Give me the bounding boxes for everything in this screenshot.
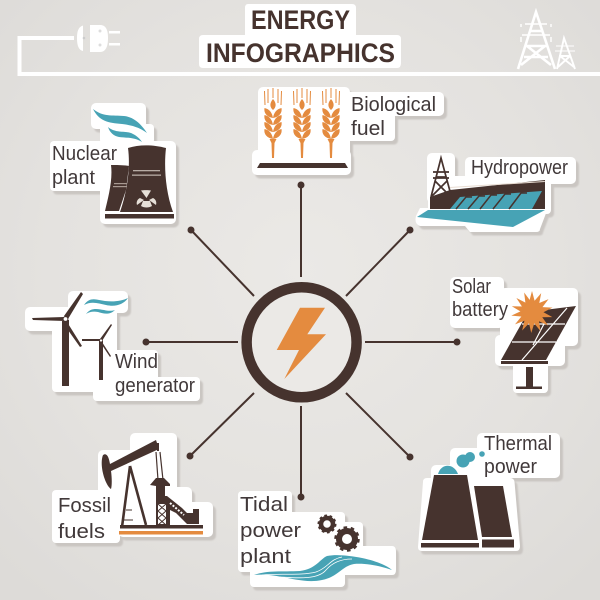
panel: nuclear plant bbox=[50, 103, 176, 224]
sticker bbox=[52, 433, 213, 543]
label bbox=[351, 94, 436, 140]
title: INFOGRAPHICS bbox=[206, 38, 395, 68]
label bbox=[115, 351, 195, 397]
label: Solar bbox=[452, 276, 491, 298]
sticker bbox=[416, 153, 576, 232]
icon: plug bbox=[77, 25, 120, 52]
wind swirls bbox=[84, 298, 128, 306]
pump rod bbox=[156, 452, 163, 480]
frame bbox=[122, 466, 146, 527]
sticker bbox=[25, 291, 200, 401]
sticker bbox=[418, 433, 560, 551]
gearbox tower bbox=[150, 478, 199, 525]
panel: thermal power bbox=[418, 433, 560, 551]
label bbox=[484, 433, 552, 478]
label: power bbox=[240, 520, 301, 542]
sun bbox=[511, 291, 553, 333]
panel: tidal power plant bbox=[238, 491, 396, 587]
tower bbox=[431, 158, 451, 197]
panel: fossil fuels bbox=[52, 433, 213, 543]
panel: wind generator bbox=[25, 291, 200, 401]
title stickers bbox=[199, 4, 401, 68]
wheat bbox=[264, 88, 340, 158]
icon: lightning bolt bbox=[277, 308, 326, 379]
turbines bbox=[450, 191, 542, 209]
label: battery bbox=[452, 299, 508, 321]
panel: hydropower bbox=[416, 153, 576, 232]
label: Wind bbox=[115, 351, 158, 373]
label bbox=[52, 143, 117, 189]
label bbox=[452, 276, 508, 321]
cooling towers bbox=[105, 165, 129, 211]
sticker bbox=[252, 87, 444, 175]
label: Thermal bbox=[484, 433, 552, 455]
panel bbox=[501, 306, 576, 360]
beam bbox=[102, 440, 159, 489]
sticker bbox=[238, 491, 396, 587]
label: plant bbox=[240, 546, 292, 568]
sticker bbox=[450, 277, 578, 393]
panel: biological fuel bbox=[252, 87, 444, 175]
label: fuel bbox=[351, 118, 385, 140]
central energy ring bbox=[247, 287, 357, 397]
wheat base bbox=[257, 163, 348, 168]
label: Hydropower bbox=[471, 157, 568, 179]
small turbine bbox=[82, 324, 112, 380]
label: Tidal bbox=[240, 494, 288, 516]
water bbox=[417, 210, 545, 227]
icon: pylons bbox=[518, 12, 575, 69]
panel: solar battery bbox=[450, 276, 578, 393]
towers bbox=[422, 475, 478, 540]
label: plant bbox=[52, 167, 95, 189]
gears bbox=[318, 516, 358, 550]
dam bbox=[430, 180, 545, 209]
label: generator bbox=[115, 375, 195, 397]
label: power bbox=[484, 456, 537, 478]
spokes bbox=[144, 182, 460, 500]
large turbine bbox=[32, 292, 83, 386]
label: fuels bbox=[58, 521, 105, 543]
label: Biological bbox=[351, 94, 436, 116]
power cord frame bbox=[20, 38, 600, 74]
label bbox=[240, 494, 301, 568]
wave bbox=[254, 555, 392, 581]
title: ENERGY bbox=[251, 5, 350, 35]
radiation symbol bbox=[137, 190, 156, 208]
smoke bbox=[93, 109, 147, 133]
title bbox=[199, 4, 401, 68]
steam bbox=[438, 451, 485, 474]
label: Nuclear bbox=[52, 143, 117, 165]
sticker bbox=[50, 103, 176, 224]
label bbox=[58, 495, 111, 543]
label: Fossil bbox=[58, 495, 111, 517]
ground bbox=[120, 525, 203, 528]
